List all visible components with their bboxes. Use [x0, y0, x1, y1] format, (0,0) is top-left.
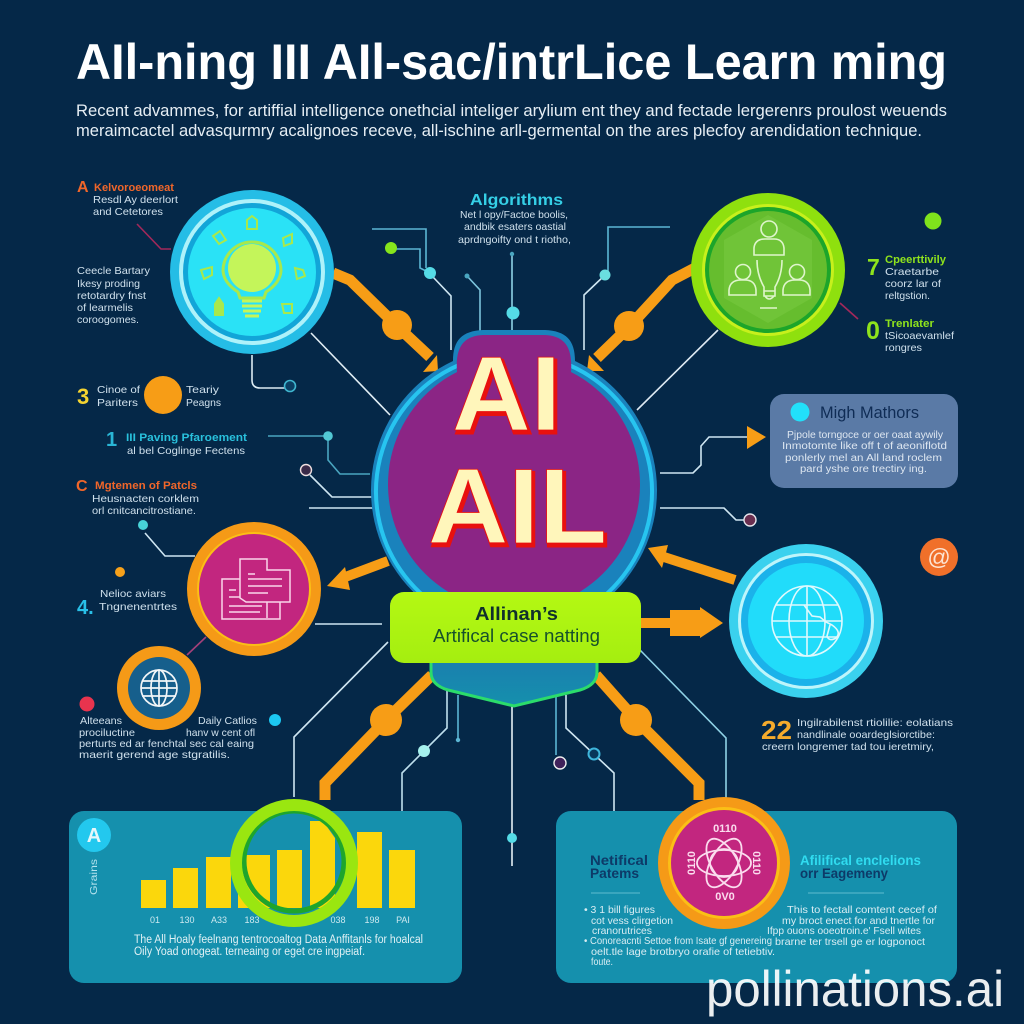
right heading: Afilifical enclelions — [800, 852, 921, 868]
left bullet list: foute. — [591, 956, 613, 968]
callout: number 0: Trenlater — [885, 318, 935, 330]
text block: bottom left description: perturts ed ar fenchtal sec cal eaing — [79, 738, 254, 750]
left bullet list: cranorutrices — [592, 925, 652, 937]
callout: number 22: 22 — [761, 715, 792, 745]
chart caption: Oily Yoad onogeat. terneaing or eget cre ingpeiaf. — [134, 946, 365, 958]
right text block: brarne ter trsell ge er logponoct — [775, 936, 925, 948]
right heading — [800, 852, 921, 881]
chart axis labels — [150, 915, 410, 925]
right heading: orr Eagemeny — [800, 865, 888, 881]
callout: number 1: III Paving Pfaroement — [126, 432, 247, 444]
icon: lightbulb circle — [170, 190, 334, 354]
icon: small globe circle — [117, 646, 201, 730]
callout: reinforcement: A — [77, 179, 89, 196]
left heading: Netifical — [590, 852, 648, 868]
callout: number 22: nandlinale ooardeglsiorctibe: — [797, 729, 935, 741]
panel: high matters: Inmotomte like off t of aeoniflotd — [782, 441, 947, 452]
right text block: Ifpp ouons ooeotroin.e' Fsell wites — [767, 925, 921, 937]
callout: number 7: 7 — [867, 254, 880, 280]
callout: number 7: Cpeerttivily — [885, 254, 947, 266]
AI lettering: AI — [452, 335, 561, 453]
icon: atom circle: 0110 — [686, 851, 698, 875]
callout: number 22: creern longremer tad tou ieretmiry, — [762, 741, 934, 753]
text block: left description: Ikesy proding — [77, 278, 140, 290]
callout: C: orl cnitcancitrostiane. — [92, 505, 196, 517]
panel: high matters: ponlerly mel an All land roclem — [785, 453, 942, 464]
panel: high matters — [770, 394, 958, 488]
callout: C: Mgtemen of Patcls — [95, 480, 197, 492]
icon: at sign badge: @ — [927, 544, 951, 570]
callout: reinforcement: Resdl Ay deerlort — [93, 194, 178, 206]
callout: number 0 — [866, 317, 954, 354]
right text block: my broct enect for and tnertle for — [782, 915, 935, 927]
callout: number 4: Tngnenentrtes — [99, 601, 177, 613]
left bullet list — [584, 904, 775, 968]
callout: number 4: Nelioc aviars — [100, 588, 166, 600]
callout: reinforcement: and Cetetores — [93, 206, 163, 218]
callout: algorithms: Algorithms — [470, 192, 563, 209]
AIL lettering: AIL — [430, 449, 609, 569]
text block: bottom left description — [79, 715, 257, 761]
arrow: to high matters panel — [747, 426, 766, 449]
left heading — [590, 852, 648, 881]
callout: C: Heusnacten corklem — [92, 493, 199, 505]
chart axis labels: 198 — [364, 915, 380, 925]
panel: high matters: Pjpole torngoce or oer oaat aywily — [787, 430, 943, 441]
callout: number 4: 4. — [77, 597, 94, 619]
text block: bottom left description: Alteeans — [80, 715, 122, 727]
title: AIl-ning III AIl-sac/intrLice Learn ming — [76, 34, 947, 90]
callout: number 1 — [106, 429, 247, 457]
intro text — [76, 101, 947, 140]
central label box: Artifical case natting — [433, 626, 600, 646]
intro text: meraimcactel advasqurmry acalignoes receve, all-ischine arll-germental on the ares plecfoy arendidation technique. — [76, 121, 922, 140]
callout: number 0: tSicoaevamlef — [885, 330, 954, 342]
callout: algorithms — [458, 192, 571, 246]
right text block — [767, 904, 937, 948]
orange arrow: from globe circle — [648, 545, 735, 580]
chart axis labels: A33 — [211, 915, 227, 925]
callout: number 4 — [77, 588, 177, 619]
callout: number 3 — [77, 376, 221, 414]
callout: number 22: Ingilrabilenst rtiolilie: eolatians — [797, 717, 953, 729]
callout: number 3: Teariy — [186, 384, 220, 396]
bulb — [223, 242, 281, 316]
text block: left description: Ceecle Bartary — [77, 265, 151, 277]
callout: number 3: Pariters — [97, 397, 138, 409]
icon: atom circle: 0110 — [750, 851, 762, 875]
callout: algorithms: aprdngoifty ond t riotho, — [458, 234, 571, 246]
callout: algorithms: andbik esaters oastial — [464, 221, 566, 233]
panel: high matters: pard yshe ore trectiry ing. — [800, 464, 927, 475]
callout: number 7 — [867, 254, 947, 302]
left bullet list: oelt.tle lage brotbryo orafie of tetiebtiv. — [591, 946, 775, 958]
callout: algorithms: Net l opy/Factoe boolis, — [460, 209, 568, 221]
chart axis labels: 038 — [330, 915, 346, 925]
text block: bottom left description: prociluctine — [79, 727, 135, 739]
orange arrow: top right — [587, 268, 695, 371]
shield under label — [431, 660, 597, 706]
text block: left description: coroogomes. — [77, 314, 139, 326]
chart caption — [134, 934, 423, 958]
chart axis labels: 183 — [244, 915, 260, 925]
connector nodes — [80, 212, 942, 843]
AIL lettering: AIL — [428, 446, 607, 566]
orange arrow: top left — [333, 273, 438, 372]
panel: bar chart — [69, 805, 462, 983]
small idea icons — [201, 216, 305, 315]
AI lettering: AI — [454, 338, 563, 456]
callout: reinforcement — [77, 179, 178, 218]
central AI emblem — [371, 330, 657, 633]
panel: high matters: Migh Mathors — [820, 404, 919, 422]
callout: number 3: Cinoe of — [97, 384, 140, 396]
icon: A badge: A — [87, 825, 101, 847]
callout: number 0: 0 — [866, 317, 880, 345]
left bullet list: cot vess clirgetion — [591, 915, 673, 927]
orange arrow: to globe circle — [641, 607, 723, 638]
icon: atom circle — [658, 797, 790, 929]
callout: reinforcement: Kelvoroeomeat — [94, 182, 174, 194]
callout: number 22 — [761, 715, 953, 753]
orange connector: bottom right — [596, 675, 699, 800]
icon: atom circle: 0110 — [713, 823, 737, 835]
orange arrow: to document circle — [327, 561, 388, 590]
callout: number 7: coorz lar of — [885, 278, 941, 290]
circuit connector lines — [137, 224, 858, 866]
icon: A badge — [77, 818, 111, 852]
icon: large globe circle — [729, 544, 883, 698]
text block: left description — [77, 265, 151, 326]
callout: number 1: 1 — [106, 429, 117, 451]
callout: number 0: rongres — [885, 342, 922, 354]
text block: bottom left description: hanv w cent ofl — [186, 727, 255, 739]
central label box — [390, 592, 641, 663]
left bullet list: • 3 1 bill figures — [584, 904, 655, 916]
icon: at sign badge — [920, 538, 958, 576]
chart axis labels: PAI — [396, 915, 410, 925]
callout: number 7: reltgstion. — [885, 290, 930, 302]
intro text: Recent advammes, for artiffial intelligence onethcial inteliger arylium ent they and fectade lergerenrs proulost weuends — [76, 101, 947, 120]
icon: people circle — [691, 193, 845, 347]
orange connector: bottom left — [325, 675, 432, 800]
icon: atom circle: 0V0 — [715, 891, 735, 903]
axis label: Grains — [89, 859, 100, 895]
callout: C: C — [76, 478, 88, 495]
callout: number 3: 3 — [77, 384, 89, 409]
chart axis labels: 01 — [150, 915, 160, 925]
callout: number 7: Craetarbe — [885, 266, 939, 278]
chart axis labels: 130 — [179, 915, 195, 925]
left heading: Patems — [590, 865, 639, 881]
icon: document circle — [187, 522, 321, 656]
text block: bottom left description: Daily Catlios — [198, 715, 257, 727]
callout: number 1: al bel Coglinge Fectens — [127, 445, 245, 457]
left bullet list: • Conoreacnti Settoe from Isate gf genereing — [584, 935, 772, 947]
text block: bottom left description: maerit gerend age stgratilis. — [79, 749, 230, 761]
right text block: This to fectall comtent cecef of — [787, 904, 937, 916]
callout: C — [76, 478, 199, 517]
bar chart — [141, 821, 415, 908]
text block: left description: of learmelis — [77, 302, 133, 314]
text block: left description: retotardry fnst — [77, 290, 146, 302]
panel: neural patterns — [556, 811, 957, 983]
central label box: Allinan’s — [475, 604, 558, 624]
callout: number 3: Peagns — [186, 397, 221, 409]
chart caption: The All Hoaly feelnang tentrocoaltog Data Anffitanls for hoalcal — [134, 934, 423, 946]
icon: green ring — [236, 805, 352, 921]
watermark: pollinations.ai — [706, 961, 1004, 1017]
